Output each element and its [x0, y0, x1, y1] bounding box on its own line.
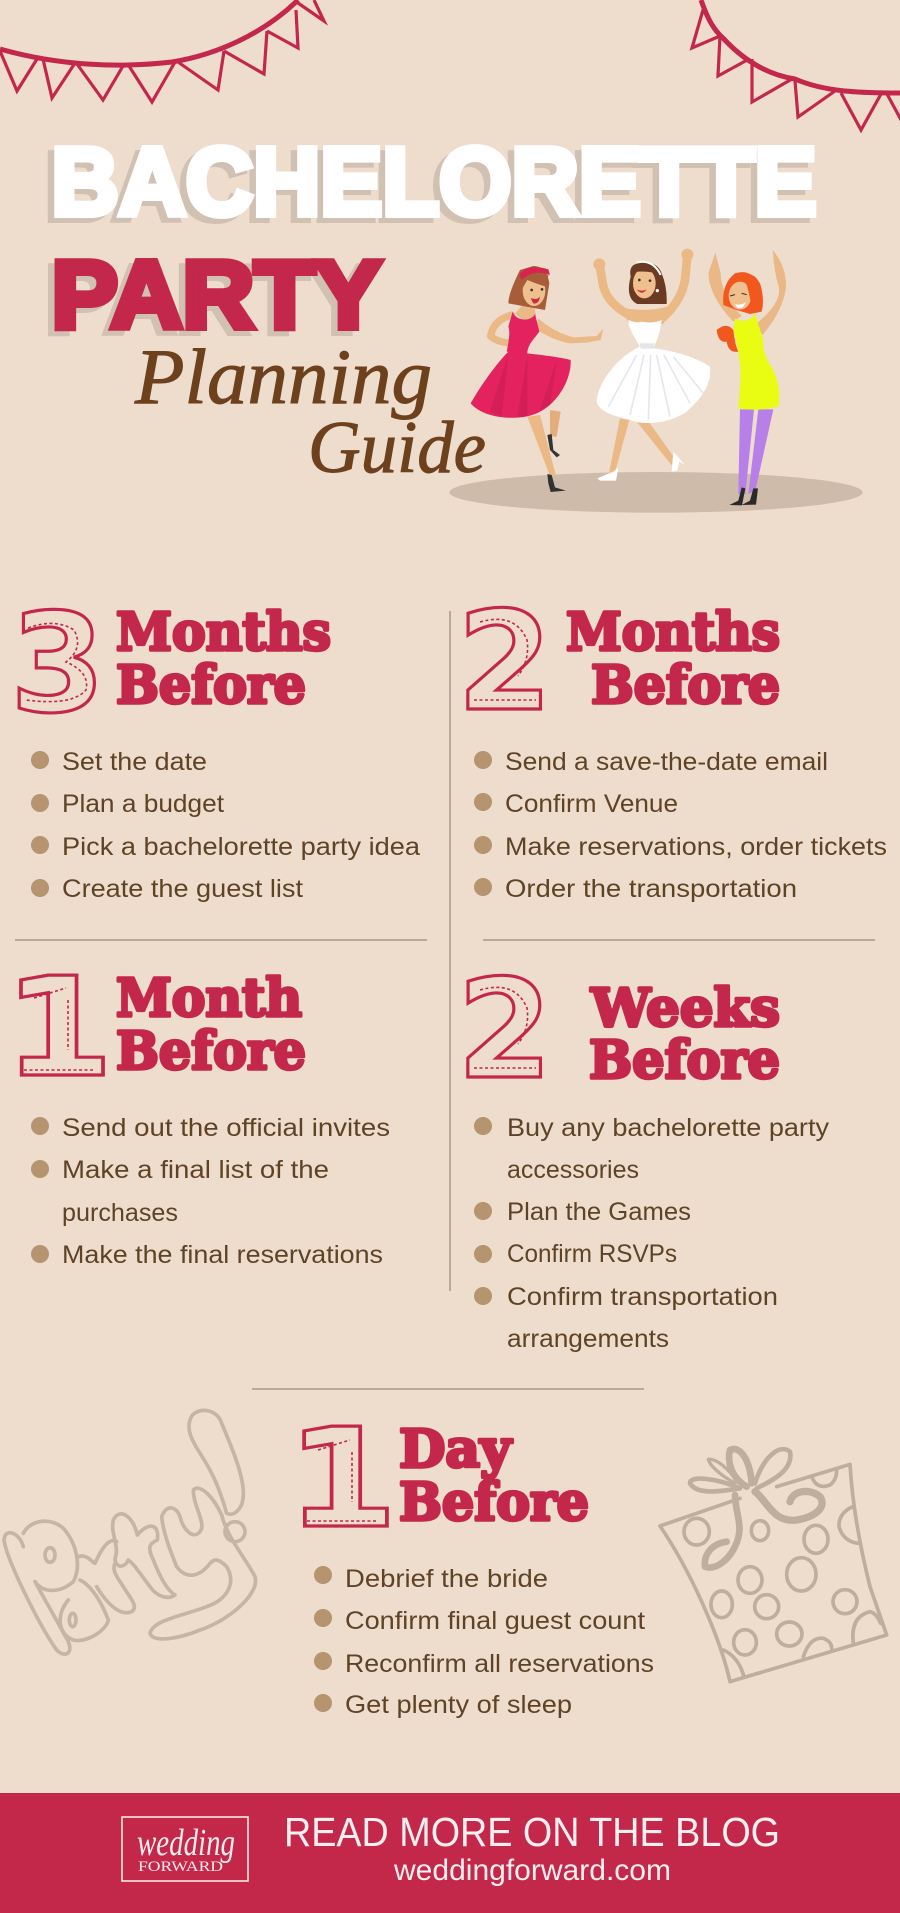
- numeral 3: 3: [10, 585, 105, 744]
- checklist: [474, 1114, 830, 1353]
- title line: bachelorette: BACHELORETTE: [52, 128, 816, 236]
- logo: wedding forward: FORWARD: [138, 1859, 223, 1875]
- heading: Months: [566, 602, 780, 663]
- panel: 2 weeks before: [457, 951, 830, 1353]
- vertical column divider: [449, 611, 451, 1291]
- checklist: arrangements: [507, 1325, 669, 1353]
- checklist: [31, 1114, 390, 1269]
- icon: gift box doodle: [660, 1449, 887, 1682]
- heading: [399, 1419, 589, 1533]
- gift bow and ribbon: [690, 1449, 822, 1567]
- heading: [116, 968, 306, 1082]
- panel: 1 month before: [3, 949, 390, 1269]
- heading: Before: [399, 1472, 589, 1533]
- checklist: [314, 1565, 654, 1719]
- numeral 2: 2: [457, 951, 552, 1110]
- heading: Before: [116, 655, 306, 716]
- heading: Before: [116, 1021, 306, 1082]
- numeral 2: 2: [457, 583, 552, 742]
- checklist: Confirm final guest count: [345, 1607, 645, 1635]
- checklist: Send out the official invites: [62, 1114, 390, 1142]
- horizontal divider: right: [483, 939, 875, 941]
- panel: 1 day before: [286, 1400, 654, 1719]
- checklist: purchases: [62, 1199, 178, 1227]
- checklist: Confirm Venue: [505, 790, 678, 818]
- subtitle: planning: Planning: [134, 333, 432, 420]
- title: [45, 128, 816, 489]
- logo: wedding forward: wedding: [137, 1822, 235, 1864]
- woman in pink dress: [471, 266, 603, 492]
- checklist: [474, 748, 887, 903]
- checklist: Reconfirm all reservations: [345, 1650, 654, 1678]
- checklist: Set the date: [62, 748, 207, 776]
- checklist: Plan the Games: [507, 1198, 691, 1226]
- heading: [589, 978, 780, 1091]
- checklist: Plan a budget: [62, 790, 224, 818]
- horizontal divider: bottom: [252, 1388, 644, 1390]
- checklist: accessories: [507, 1156, 639, 1184]
- checklist: Make a final list of the: [62, 1156, 329, 1184]
- checklist: [31, 748, 420, 903]
- horizontal divider: left: [15, 939, 427, 941]
- heading: Month: [116, 968, 302, 1029]
- call to action: READ MORE ON THE BLOG: [284, 1809, 780, 1855]
- title line: party: PARTY: [45, 246, 375, 354]
- panel: 2 months before: [457, 583, 887, 903]
- checklist: Confirm RSVPs: [507, 1240, 677, 1268]
- bunting: top left: [0, 0, 324, 102]
- illustration: three dancing women: [449, 249, 863, 513]
- checklist: Create the guest list: [62, 875, 303, 903]
- checklist: Order the transportation: [505, 875, 797, 903]
- checklist: Send a save-the-date email: [505, 748, 828, 776]
- logo: wedding forward: [122, 1817, 248, 1881]
- heading: Weeks: [590, 978, 780, 1039]
- checklist: Buy any bachelorette party: [507, 1114, 830, 1142]
- checklist: Get plenty of sleep: [345, 1691, 572, 1719]
- checklist: Pick a bachelorette party idea: [62, 833, 420, 861]
- heading: Day: [399, 1419, 513, 1480]
- footer band: [0, 1793, 900, 1913]
- checklist: Confirm transportation: [507, 1283, 778, 1311]
- numeral 1: 1: [286, 1400, 398, 1559]
- icon: party doodle: [4, 1410, 256, 1654]
- heading: Before: [589, 1030, 780, 1091]
- bride in white dress: [593, 249, 710, 481]
- numeral 1: 1: [3, 949, 114, 1108]
- bunting: top right: [692, 0, 900, 130]
- heading: Before: [591, 655, 780, 716]
- redhead in yellow dress: [708, 253, 785, 505]
- subtitle: guide: Guide: [308, 407, 486, 489]
- heading: [566, 602, 780, 716]
- title line: bachelorette: BACHELORETTE: [45, 134, 810, 240]
- floor shadow: [449, 472, 863, 513]
- heading: [116, 602, 331, 716]
- website url: weddingforward.com: [393, 1854, 671, 1887]
- heading: Months: [116, 602, 331, 663]
- title line: party: PARTY: [52, 242, 382, 348]
- checklist: Debrief the bride: [345, 1565, 548, 1593]
- panel: 3 months before: [10, 585, 420, 903]
- checklist: Make reservations, order tickets: [505, 833, 887, 861]
- checklist: Make the final reservations: [62, 1241, 383, 1269]
